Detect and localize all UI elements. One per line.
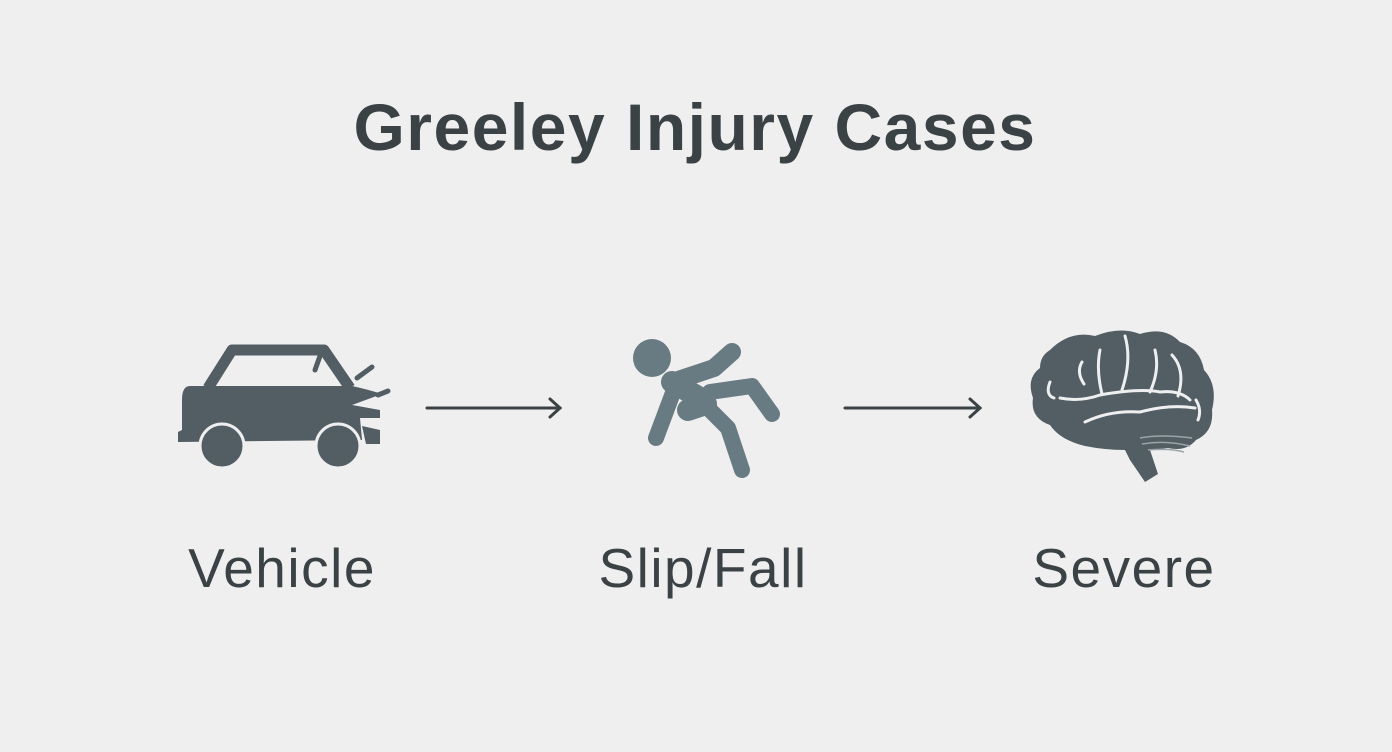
title: Greeley Injury Cases — [353, 90, 1037, 164]
arrow 1 — [427, 399, 560, 417]
icon: car — [178, 350, 388, 468]
label: Severe: Severe — [1032, 537, 1216, 599]
label: Slip/Fall: Slip/Fall — [598, 537, 808, 599]
arrow 2 — [845, 399, 980, 417]
icon: slip/fall person — [633, 339, 772, 470]
label: Vehicle: Vehicle — [188, 537, 376, 599]
icon: brain — [1031, 330, 1214, 482]
